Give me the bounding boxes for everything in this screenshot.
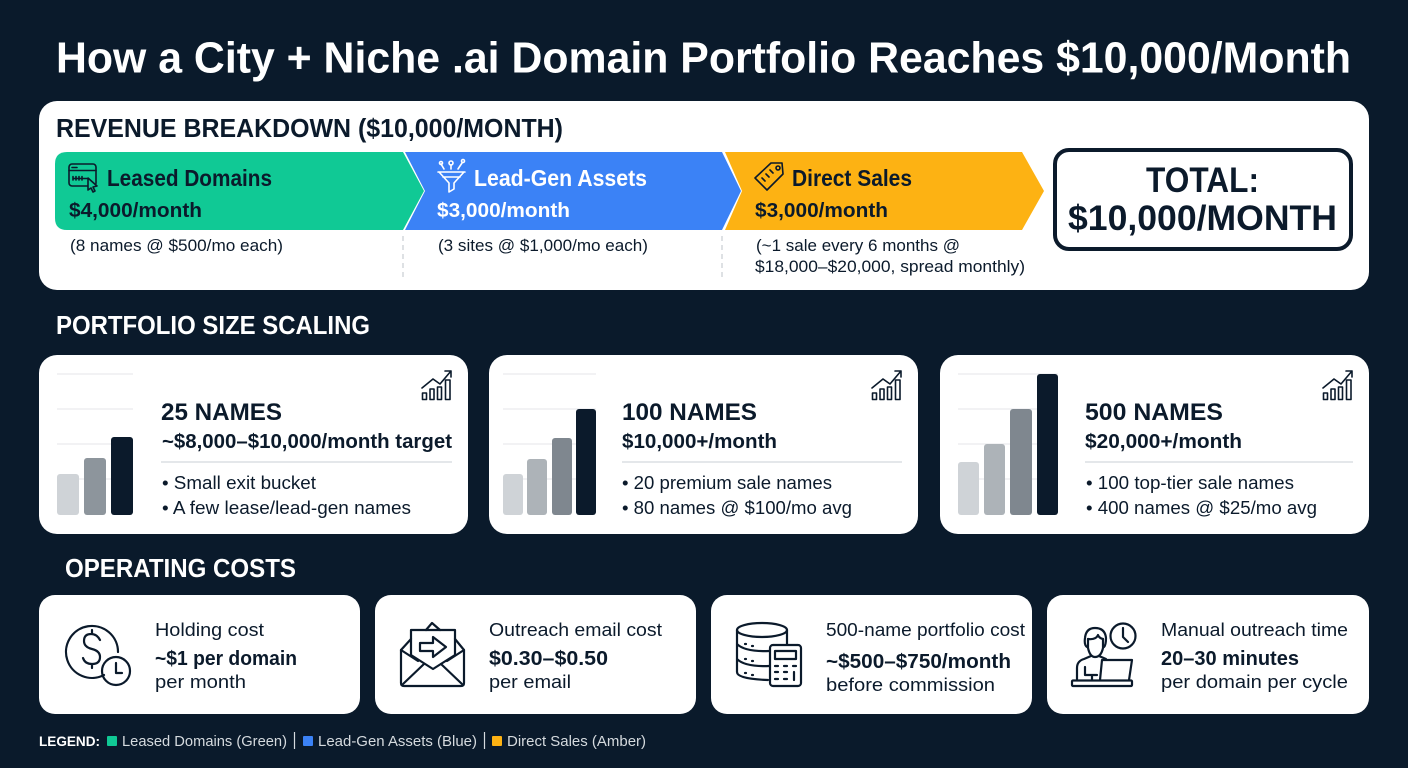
label: holding cost: Holding cost xyxy=(155,619,264,640)
legend: Direct Sales (Amber) xyxy=(507,734,646,750)
panel: revenue breakdown xyxy=(39,101,1369,290)
icon: database and calculator xyxy=(737,623,801,686)
title: How a City + Niche .ai Domain Portfolio Reaches $10,000/Month xyxy=(56,34,1351,82)
heading: operating costs: OPERATING COSTS xyxy=(65,555,296,583)
panel: 500 names xyxy=(940,355,1369,534)
legend: Leased Domains (Green) xyxy=(122,734,287,750)
bullets: 100 names: • 80 names @ $100/mo avg xyxy=(622,498,852,518)
detail: manual outreach time: per domain per cycle xyxy=(1161,671,1348,692)
bar chart: 500 names xyxy=(958,374,1058,515)
card target: 500 names: $20,000+/month xyxy=(1085,431,1242,453)
bullets: 25 names: • A few lease/lead-gen names xyxy=(162,498,411,518)
panel: manual outreach time xyxy=(1047,595,1369,714)
bullets: 25 names xyxy=(162,473,411,518)
value: 500-name portfolio cost: ~$500–$750/month xyxy=(826,650,1011,673)
segment: direct sales xyxy=(725,152,1044,230)
panel: 25 names xyxy=(39,355,468,534)
card heading: 100 names: 100 NAMES xyxy=(622,399,757,426)
detail: holding cost: per month xyxy=(155,671,246,692)
value: outreach email cost: $0.30–$0.50 xyxy=(489,647,608,670)
bar chart: 25 names xyxy=(57,437,133,515)
label: lead-gen assets: Lead-Gen Assets xyxy=(474,165,647,191)
detail: 500-name portfolio cost: before commission xyxy=(826,674,995,695)
label: direct sales: Direct Sales xyxy=(792,165,912,191)
label: manual outreach time: Manual outreach time xyxy=(1161,619,1348,640)
value: leased domains: $4,000/month xyxy=(69,199,202,222)
panel: 500-name portfolio cost xyxy=(711,595,1032,714)
card heading: 25 names: 25 NAMES xyxy=(161,399,282,426)
card target: 25 names: ~$8,000–$10,000/month target xyxy=(162,431,452,453)
note: direct sales xyxy=(755,236,1025,276)
icon: person at laptop with clock xyxy=(1072,624,1136,686)
icon: envelope with letter xyxy=(401,623,464,686)
note: lead-gen assets: (3 sites @ $1,000/mo each) xyxy=(438,236,648,255)
segment: leased domains xyxy=(55,152,424,230)
icon: browser with cursor xyxy=(69,164,97,192)
label: outreach email cost: Outreach email cost xyxy=(489,619,662,640)
value: direct sales: $3,000/month xyxy=(755,199,888,222)
heading: portfolio size scaling: PORTFOLIO SIZE SCALING xyxy=(56,312,370,340)
value: manual outreach time: 20–30 minutes xyxy=(1161,647,1299,670)
callout: total xyxy=(1055,150,1351,249)
detail: outreach email cost: per email xyxy=(489,671,571,692)
note: direct sales: (~1 sale every 6 months @ xyxy=(756,236,960,255)
card target: 100 names: $10,000+/month xyxy=(622,431,777,453)
icon: price tag xyxy=(755,163,783,190)
panel: holding cost xyxy=(39,595,360,714)
icon: growth chart xyxy=(422,371,451,400)
note: direct sales: $18,000–$20,000, spread monthly) xyxy=(755,257,1025,276)
label: 500-name portfolio cost: 500-name portfolio cost xyxy=(826,619,1025,640)
card heading: 500 names: 500 NAMES xyxy=(1085,399,1223,426)
value: lead-gen assets: $3,000/month xyxy=(437,199,570,222)
value: holding cost: ~$1 per domain xyxy=(155,647,297,670)
segment: lead-gen assets xyxy=(405,152,741,230)
bar chart: 100 names xyxy=(503,409,596,515)
bullets: 25 names: • Small exit bucket xyxy=(162,473,316,493)
legend xyxy=(39,732,646,750)
callout: total: $10,000/MONTH xyxy=(1068,199,1337,238)
bullets: 100 names: • 20 premium sale names xyxy=(622,473,832,493)
icon: dollar and clock xyxy=(66,626,130,685)
legend: Lead-Gen Assets (Blue) xyxy=(318,734,477,750)
bullets: 500 names: • 100 top-tier sale names xyxy=(1086,473,1294,493)
bullets: 100 names xyxy=(622,473,852,518)
icon: growth chart xyxy=(1323,371,1352,400)
callout: total: TOTAL: xyxy=(1146,161,1259,200)
panel: 100 names xyxy=(489,355,918,534)
icon: funnel xyxy=(438,160,465,192)
panel: outreach email cost xyxy=(375,595,696,714)
bullets: 500 names: • 400 names @ $25/mo avg xyxy=(1086,498,1317,518)
heading: revenue breakdown: REVENUE BREAKDOWN ($10,000/MONTH) xyxy=(56,115,563,143)
icon: growth chart xyxy=(872,371,901,400)
label: leased domains: Leased Domains xyxy=(107,165,272,191)
bullets: 500 names xyxy=(1086,473,1317,518)
legend: LEGEND: xyxy=(39,733,100,749)
note: leased domains: (8 names @ $500/mo each) xyxy=(70,236,283,255)
